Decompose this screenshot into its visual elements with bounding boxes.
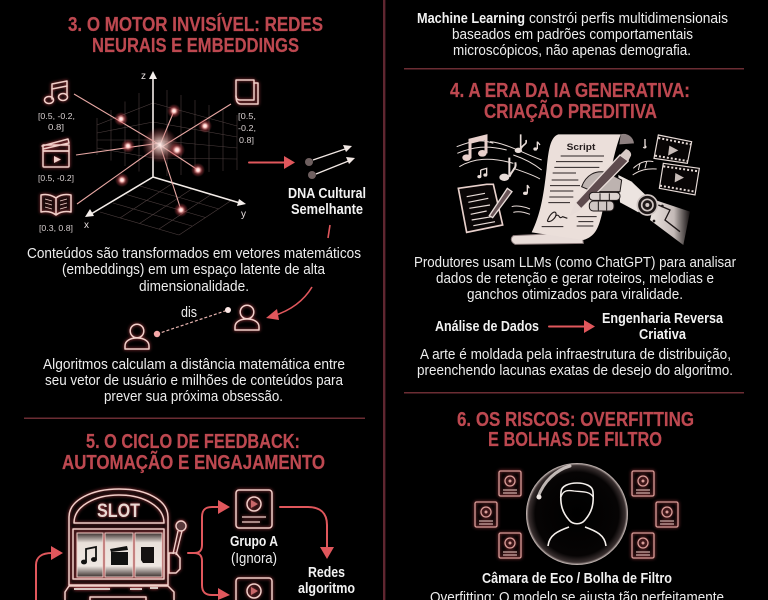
label: networks algorithm: Redes xyxy=(308,565,345,581)
label: book vector right: 0.8] xyxy=(239,135,254,145)
label: echo chamber: Câmara de Eco / Bolha de Filtro xyxy=(482,571,672,587)
icon: filter bubble with user xyxy=(526,463,628,565)
label: networks algorithm xyxy=(298,565,355,597)
heading: section 5: AUTOMAÇÃO E ENGAJAMENTO xyxy=(62,451,325,474)
label: reverse engineering: Engenharia Reversa xyxy=(602,311,724,327)
icon: user B xyxy=(235,305,259,330)
icon: clapperboard xyxy=(42,139,69,167)
text: distance description: Algoritmos calculam a distância matemática entre xyxy=(43,357,345,373)
arrow: to cultural DNA xyxy=(249,156,295,169)
icon: paper scroll xyxy=(511,134,634,244)
text: art shaped by distribution: A arte é moldada pela infraestrutura de distribuição, xyxy=(420,347,731,363)
icon: user A xyxy=(125,324,149,349)
chart: 3D embedding space: x xyxy=(84,220,89,231)
panel: machine learning text: microscópicos, não apenas demografia. xyxy=(453,43,691,59)
text: art shaped by distribution xyxy=(417,347,733,379)
icon: paper scroll: Script xyxy=(567,142,595,152)
text: distance description: prever sua próxima obsessão. xyxy=(104,389,283,405)
label: group A: Grupo A xyxy=(230,534,278,550)
text: embeddings description: dimensionalidade. xyxy=(139,279,249,295)
text: distance description xyxy=(43,357,345,405)
panel: machine learning text xyxy=(417,11,728,59)
icon: content card bottom right xyxy=(632,533,654,558)
heading: section 5 xyxy=(62,430,325,474)
heading: section 4: 4. A ERA DA IA GENERATIVA: xyxy=(450,79,690,102)
heading: section 3: 3. O MOTOR INVISÍVEL: REDES xyxy=(68,13,323,36)
label: group A: (Ignora) xyxy=(231,551,277,567)
panel: machine learning text: baseados em padrões comportamentais xyxy=(452,27,693,43)
label: book vector right: -0.2, xyxy=(238,123,256,133)
heading: section 5: 5. O CICLO DE FEEDBACK: xyxy=(86,430,300,453)
label: music vector: 0.8] xyxy=(48,122,64,132)
heading: section 4 xyxy=(450,79,690,123)
text: embeddings description: Conteúdos são transformados em vetores matemáticos xyxy=(27,246,361,262)
label: book vector right: [0.5, xyxy=(238,111,256,121)
icon: open book xyxy=(41,194,71,215)
label: networks algorithm: algoritmo xyxy=(298,581,355,597)
label: group A xyxy=(230,534,278,567)
arrow: group A to networks xyxy=(280,507,334,559)
icon: content card middle left xyxy=(475,502,497,527)
icon: content card top left xyxy=(499,471,521,496)
chart: 3D embedding space: y xyxy=(241,209,246,220)
label: cultural DNA: DNA Cultural xyxy=(288,186,366,202)
text: embeddings description: (embeddings) em um espaço latente de alta xyxy=(62,262,326,278)
arrow: loop back into machine xyxy=(36,546,63,600)
label: cultural DNA: Semelhante xyxy=(291,202,363,218)
heading: section 6 xyxy=(457,408,694,451)
icon: notes page and pencil xyxy=(458,184,512,232)
icon: slot machine xyxy=(65,489,186,600)
diagram: distance line xyxy=(154,305,231,337)
arrow: curved to user xyxy=(266,225,330,320)
arrow: split to groups xyxy=(188,500,230,600)
chart: 3D embedding space xyxy=(74,71,246,235)
label: book vector right xyxy=(238,111,256,145)
icon: video card group B xyxy=(236,578,272,600)
panel: section 5 feedback loop xyxy=(36,430,355,600)
icon: content card top right xyxy=(632,471,654,496)
label: music vector: [0.5, -0.2, xyxy=(38,111,75,121)
icon: video card group A xyxy=(236,490,272,528)
text: LLM description: dados de retenção e gerar roteiros, melodias e xyxy=(436,271,714,287)
illustration: robot hand writing script xyxy=(457,134,699,245)
label: cultural DNA xyxy=(288,186,366,218)
label: music vector xyxy=(38,111,75,132)
panel: section 6 risks xyxy=(430,408,724,600)
label: reverse engineering xyxy=(602,311,724,343)
icon: slot machine: SLOT xyxy=(97,501,140,522)
label: book vector: [0.3, 0.8] xyxy=(39,223,73,233)
heading: section 3: NEURAIS E EMBEDDINGS xyxy=(92,34,299,57)
panel: section 3 neural networks and embeddings xyxy=(27,13,366,405)
label: video vector: [0.5, -0.2] xyxy=(38,173,74,183)
icon: robot arm and hand xyxy=(571,149,690,245)
text: LLM description: Produtores usam LLMs (como ChatGPT) para analisar xyxy=(414,255,736,271)
icon: similar vectors xyxy=(305,145,355,179)
icon: music notes and staves xyxy=(457,134,657,214)
heading: section 6: 6. OS RISCOS: OVERFITTING xyxy=(457,408,694,431)
center vertical divider xyxy=(383,0,385,600)
diagram: distance line: dis xyxy=(181,305,197,321)
icon: closed book xyxy=(236,80,258,104)
arrow: analysis to reverse engineering xyxy=(549,320,595,333)
label: data analysis: Análise de Dados xyxy=(435,319,539,335)
text: distance description: seu vetor de usuário e milhões de conteúdos para xyxy=(45,373,344,389)
chart: 3D embedding space: z xyxy=(141,71,146,82)
heading: section 4: CRIAÇÃO PREDITIVA xyxy=(484,100,657,123)
text: LLM description xyxy=(414,255,736,303)
icon: content card middle right xyxy=(656,502,678,527)
heading: section 6: E BOLHAS DE FILTRO xyxy=(488,428,662,451)
heading: section 3 xyxy=(68,13,323,57)
panel: machine learning text: Machine Learning xyxy=(417,11,525,27)
text: art shaped by distribution: preenchendo lacunas exatas de desejo do algoritmo. xyxy=(417,363,733,379)
text: embeddings description xyxy=(27,246,361,295)
text: LLM description: ganchos otimizados para viralidade. xyxy=(467,287,683,303)
icon: content card bottom left xyxy=(499,533,521,558)
panel: section 4 generative AI xyxy=(414,79,736,379)
icon: music note xyxy=(44,81,68,104)
panel: machine learning text: constrói perfis multidimensionais xyxy=(529,11,728,27)
icon: film strips xyxy=(654,135,699,195)
label: reverse engineering: Criativa xyxy=(639,327,687,343)
